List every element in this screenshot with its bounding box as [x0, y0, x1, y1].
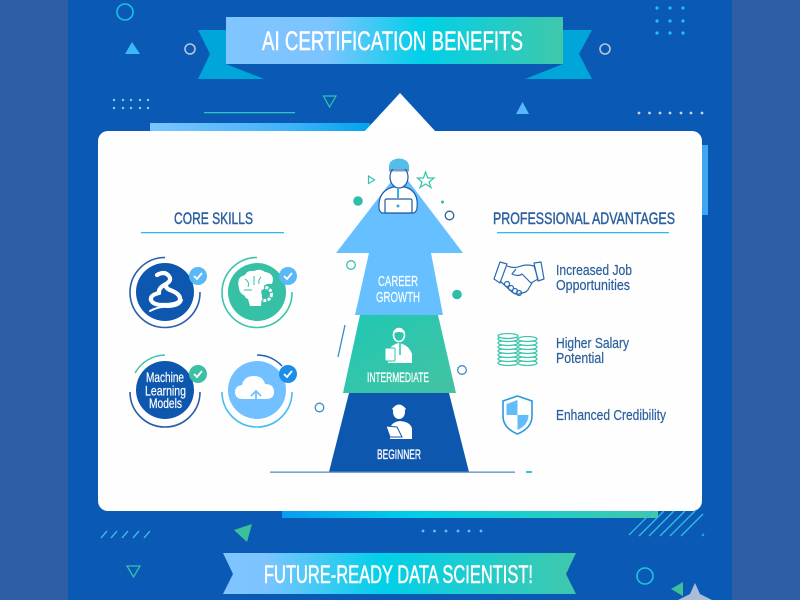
icon: coin stacks	[498, 334, 537, 366]
icon: python snake	[130, 258, 207, 328]
intermediate tier	[343, 315, 456, 393]
text: increased job opportunities	[556, 263, 632, 294]
panel: professional advantages	[493, 209, 675, 434]
panel: white card with arrow tip	[98, 93, 702, 511]
chart: career pyramid	[270, 170, 532, 473]
career growth arrow: CAREER	[378, 273, 418, 290]
intermediate tier: INTERMEDIATE	[367, 370, 429, 385]
icon: machine learning models: Learning	[145, 382, 186, 398]
heading: core skills: CORE SKILLS	[174, 209, 253, 228]
title text: AI CERTIFICATION BENEFITS	[262, 26, 523, 56]
icon: machine learning models	[130, 355, 207, 427]
icon: handshake	[494, 262, 544, 296]
heading: professional advantages: PROFESSIONAL ADVANTAGES	[493, 209, 675, 228]
text: increased job opportunities: Opportunities	[556, 278, 630, 294]
closing banner	[223, 553, 576, 594]
icon: cloud upload	[222, 355, 297, 427]
career growth arrow: GROWTH	[376, 289, 420, 306]
career growth arrow	[336, 170, 463, 315]
beginner tier: BEGINNER	[377, 447, 421, 462]
text: increased job opportunities: Increased Job	[556, 263, 632, 279]
text: higher salary potential	[556, 336, 630, 367]
beginner tier	[329, 393, 469, 472]
text: enhanced credibility: Enhanced Credibility	[556, 408, 667, 424]
icon: data scientist with laptop	[379, 158, 417, 213]
bottom decorative shapes	[101, 511, 712, 600]
panel: core skills	[130, 209, 297, 427]
icon: machine learning models: Models	[149, 395, 182, 411]
text: higher salary potential: Potential	[556, 351, 604, 367]
banner text: FUTURE-READY DATA SCIENTIST!	[264, 561, 533, 589]
icon: shield	[503, 396, 532, 434]
top decorative shapes	[113, 4, 703, 114]
icon: brain and gear	[222, 258, 297, 328]
icon: machine learning models: Machine	[146, 369, 184, 385]
title banner	[198, 17, 592, 79]
accent bands behind panel	[150, 123, 708, 518]
text: higher salary potential: Higher Salary	[556, 336, 630, 352]
floating shapes around pyramid	[315, 172, 466, 412]
